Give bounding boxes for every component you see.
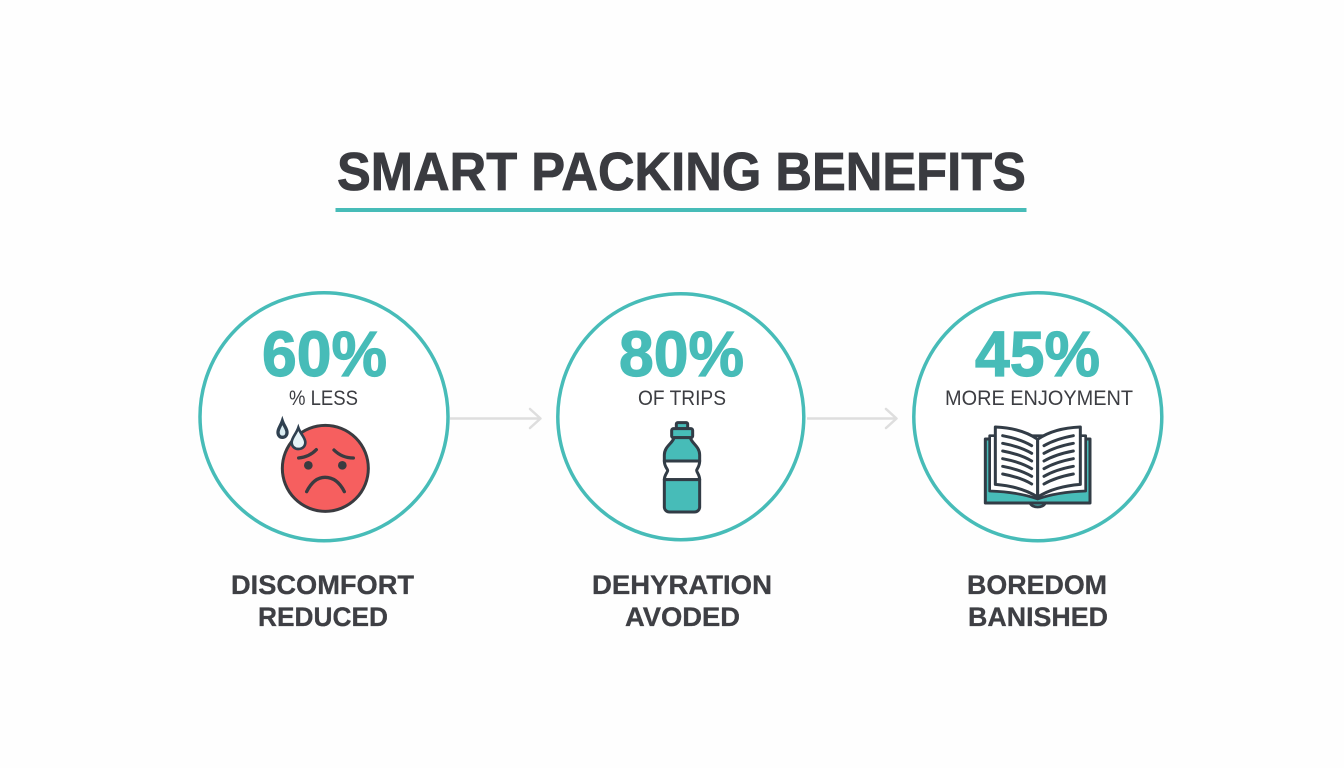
title underline <box>336 208 1026 212</box>
label: boredom banished <box>967 570 1108 632</box>
stat caption: of trips: OF TRIPS <box>638 387 726 410</box>
icon: open book <box>985 427 1090 507</box>
label: dehyration avoded: DEHYRATION <box>592 570 772 600</box>
icon: sweating sad face <box>278 421 368 511</box>
label: discomfort reduced: REDUCED <box>258 602 388 632</box>
label: dehyration avoded <box>592 570 772 632</box>
panel: boredom <box>914 293 1162 632</box>
circle: discomfort <box>200 293 448 541</box>
stat caption: more enjoyment: MORE ENJOYMENT <box>945 387 1133 410</box>
arrow: second to third <box>807 409 896 428</box>
label: discomfort reduced <box>231 570 414 632</box>
icon: water bottle <box>664 423 700 512</box>
label: boredom banished: BOREDOM <box>967 570 1107 600</box>
circle: boredom <box>914 293 1162 541</box>
title: SMART PACKING BENEFITS <box>337 142 1026 202</box>
stat: 60%: 60% <box>262 318 387 390</box>
stat: 45%: 45% <box>975 318 1100 390</box>
panel: dehydration <box>558 294 804 632</box>
stat: 80%: 80% <box>619 318 744 390</box>
label: discomfort reduced: DISCOMFORT <box>231 570 414 600</box>
panel: discomfort <box>200 293 448 632</box>
stat caption: % less: % LESS <box>289 387 358 410</box>
arrow: first to second <box>450 409 540 428</box>
circle: dehydration <box>558 294 804 540</box>
label: dehyration avoded: AVODED <box>625 602 740 632</box>
label: boredom banished: BANISHED <box>968 602 1108 632</box>
